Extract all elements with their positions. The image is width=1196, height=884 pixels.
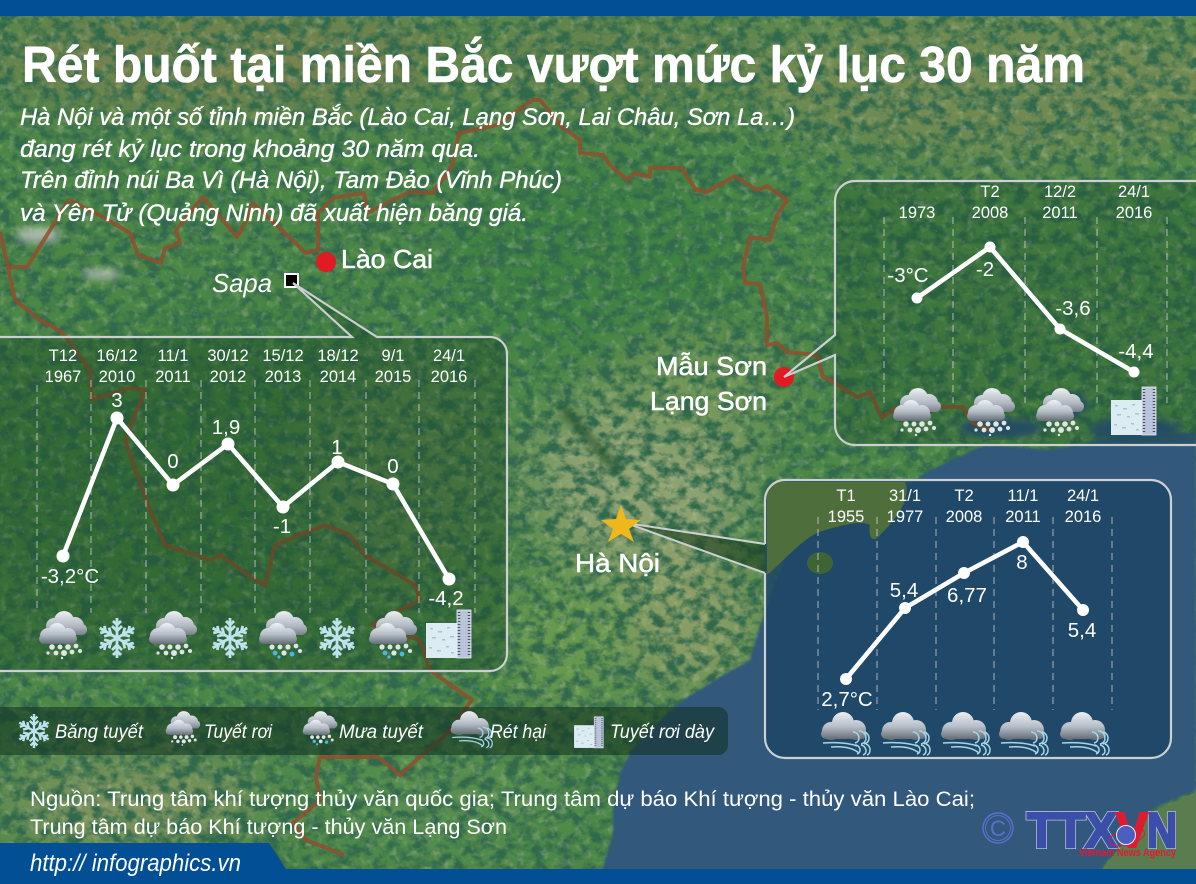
legend: Tuyết rơi <box>166 711 273 746</box>
logo: TTXVN <box>983 804 1177 859</box>
top bar <box>0 0 1196 16</box>
dates <box>899 183 1152 222</box>
values: 0 <box>167 450 179 473</box>
location: Mau Son, Lang Son: Lạng Sơn <box>650 386 767 416</box>
dates: 2014 <box>320 368 356 386</box>
dates: 1973 <box>899 204 935 222</box>
legend: Tuyết rơi: Tuyết rơi <box>204 721 273 743</box>
values: 3 <box>111 389 123 412</box>
values: -1 <box>273 515 291 538</box>
dates: 1977 <box>887 508 923 526</box>
dates <box>828 487 1101 526</box>
intro text: Hà Nội và một số tỉnh miền Bắc (Lào Cai, Lạng Sơn, Lai Châu, Sơn La…) <box>20 104 795 131</box>
footer bar: http:// infographics.vn <box>30 850 241 877</box>
line chart <box>912 242 1140 378</box>
panel: Lang Son chart <box>650 181 1196 445</box>
weather icons <box>893 387 1156 436</box>
legend: Mưa tuyết <box>303 711 425 745</box>
dates: T12 <box>49 347 77 365</box>
dates: T2 <box>954 487 974 505</box>
logo: TTXVN: TTX <box>1027 804 1117 858</box>
dates: 2010 <box>99 368 135 386</box>
values: 0 <box>387 455 399 478</box>
dates: 2011 <box>155 368 191 386</box>
intro text <box>20 104 795 227</box>
line chart <box>840 536 1089 685</box>
values: 5,4 <box>1068 619 1096 642</box>
dates: 11/1 <box>158 347 188 365</box>
location: Mau Son, Lang Son: Mẫu Sơn <box>656 351 767 381</box>
values: 2,7°C <box>821 688 873 711</box>
location: Mau Son, Lang Son <box>650 335 835 416</box>
values: -3,6 <box>1055 297 1091 320</box>
source note: Nguồn: Trung tâm khí tượng thủy văn quốc gia; Trung tâm dự báo Khí tượng - thủy văn Lào Cai; <box>30 787 975 811</box>
dates: 15/12 <box>262 347 304 365</box>
legend: Tuyết rơi dày: Tuyết rơi dày <box>610 721 715 743</box>
dates: 2011 <box>1005 508 1041 526</box>
source note: Trung tâm dự báo Khí tượng - thủy văn Lạng Sơn <box>30 815 507 839</box>
values: 5,4 <box>890 579 918 602</box>
legend: Rét hại <box>451 711 547 748</box>
dates: 31/1 <box>889 487 921 505</box>
values: -3°C <box>887 264 929 287</box>
logo: TTXVN: V <box>1116 804 1148 858</box>
footer bar <box>0 843 1196 884</box>
intro text: Trên đỉnh núi Ba Vì (Hà Nội), Tam Đảo (Vĩnh Phúc) <box>20 167 562 194</box>
location: Lao Cai: Lào Cai <box>341 244 433 274</box>
location: Ha Noi: Hà Nội <box>575 548 660 578</box>
dates: 12/2 <box>1044 183 1076 201</box>
logo: TTXVN: C <box>990 816 1006 841</box>
location: Sapa: Sapa <box>212 268 272 298</box>
dates: T2 <box>980 183 1000 201</box>
dates: 2008 <box>946 508 982 526</box>
dates: 11/1 <box>1008 487 1038 505</box>
dates: 2011 <box>1042 204 1078 222</box>
dates: 2015 <box>375 368 411 386</box>
dates <box>45 347 467 386</box>
legend: Băng tuyết: Băng tuyết <box>55 721 144 743</box>
weather icons <box>821 712 1109 755</box>
legend: Băng tuyết <box>17 714 144 748</box>
mountain ridge <box>562 408 618 470</box>
legend: Mưa tuyết: Mưa tuyết <box>339 721 425 743</box>
intro text: đang rét kỷ lục trong khoảng 30 năm qua. <box>20 136 480 163</box>
source note <box>30 787 975 839</box>
islands in panel <box>767 482 907 575</box>
values: 6,77 <box>947 584 987 607</box>
dates: 2008 <box>972 204 1008 222</box>
dates: 24/1 <box>433 347 465 365</box>
dates: 2016 <box>1116 204 1152 222</box>
values: 1 <box>331 436 343 459</box>
logo: TTXVN: TTX <box>1027 804 1117 858</box>
values <box>41 389 464 610</box>
dates: 24/1 <box>1118 183 1150 201</box>
dates: 2016 <box>431 368 467 386</box>
legend: Rét hại: Rét hại <box>490 721 547 743</box>
dates: 18/12 <box>317 347 359 365</box>
legend <box>0 707 728 755</box>
dates: 30/12 <box>207 347 249 365</box>
panel: Sapa chart <box>0 283 507 671</box>
values: -3,2°C <box>41 565 99 588</box>
dates: 16/12 <box>96 347 138 365</box>
sea <box>600 432 1196 884</box>
dates: 2016 <box>1065 508 1101 526</box>
legend: Tuyết rơi dày <box>574 717 715 748</box>
snow patches <box>16 227 122 279</box>
title: Rét buốt tại miền Bắc vượt mức kỷ lục 30 năm <box>22 35 1085 93</box>
values: 1,9 <box>212 416 240 439</box>
dates: T1 <box>836 487 856 505</box>
dates: 9/1 <box>382 347 404 365</box>
intro text: và Yên Tử (Quảng Ninh) đã xuất hiện băng giá. <box>20 200 528 227</box>
border lines <box>0 100 990 855</box>
panel: Ha Noi chart <box>765 480 1171 758</box>
dates: 1967 <box>45 368 81 386</box>
logo: TTXVN: N <box>1147 804 1177 858</box>
values: -4,2 <box>428 587 464 610</box>
logo: TTXVN: N <box>1147 804 1177 858</box>
values: -4,4 <box>1118 340 1154 363</box>
logo: TTXVN: Vietnam News Agency <box>1079 847 1177 859</box>
line chart <box>56 412 456 586</box>
weather icons <box>39 610 471 659</box>
values: -2 <box>976 258 994 281</box>
dates: 24/1 <box>1067 487 1099 505</box>
values <box>887 258 1154 363</box>
values: 8 <box>1016 551 1028 574</box>
dates: 2012 <box>210 368 246 386</box>
location: Ha Noi <box>575 505 765 578</box>
dates: 1955 <box>828 508 864 526</box>
values <box>821 551 1096 711</box>
dates: 2013 <box>265 368 301 386</box>
